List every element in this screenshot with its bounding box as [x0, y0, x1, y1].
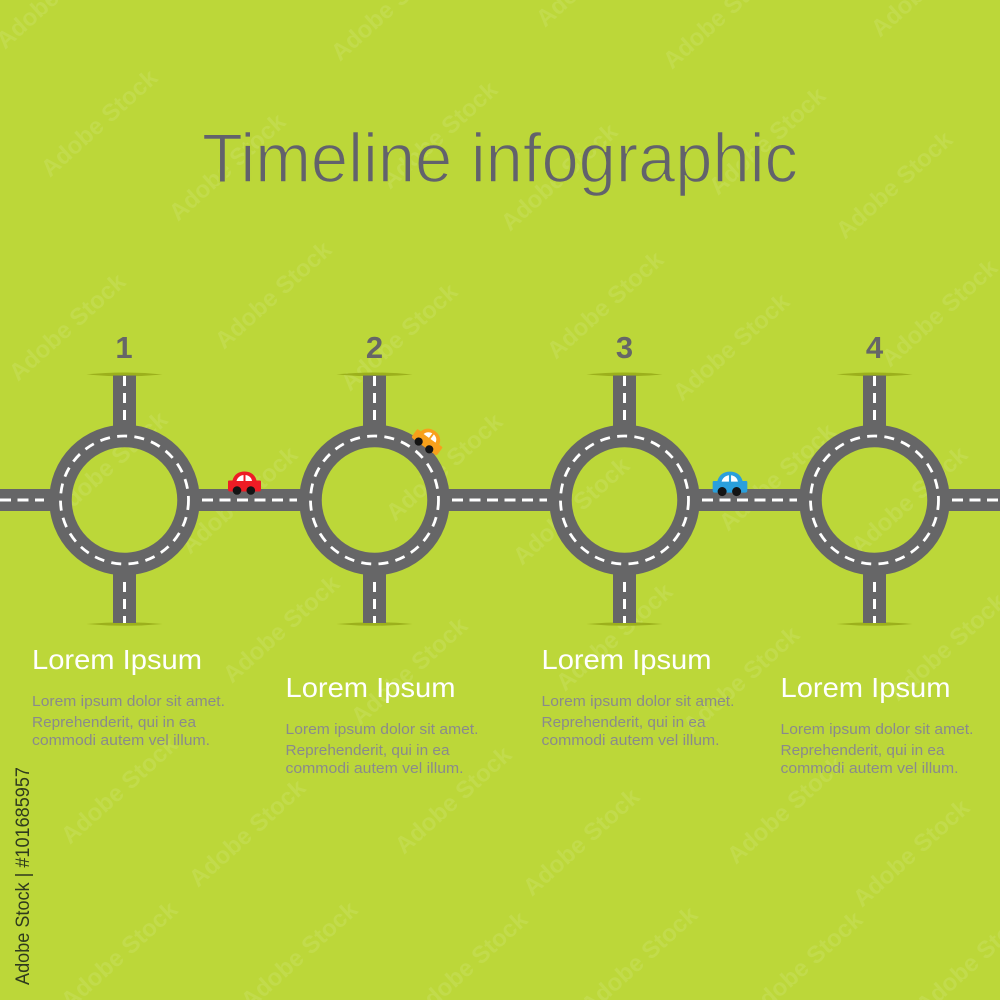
watermarks: Adobe Stock — [508, 452, 636, 570]
text block 1: Lorem ipsum dolor sit amet. — [32, 694, 225, 710]
text block 3 — [542, 644, 734, 749]
text block 1: Reprehenderit, qui in ea — [32, 715, 197, 731]
watermarks: Adobe Stock — [4, 268, 132, 386]
step numbers: 2 — [366, 330, 383, 365]
watermarks: Adobe Stock — [336, 278, 464, 396]
icon: orange car — [409, 422, 448, 458]
text block 1 — [32, 644, 225, 749]
watermarks: Adobe Stock — [551, 578, 679, 696]
text block 4: Lorem ipsum dolor sit amet. — [780, 722, 974, 738]
watermarks: Adobe Stock — [496, 118, 624, 236]
icon: red car — [228, 472, 261, 495]
watermarks: Adobe Stock — [542, 246, 670, 364]
title: Timeline infographic — [202, 119, 798, 197]
roundabout 4 — [810, 372, 938, 626]
text block 1: Lorem Ipsum — [32, 644, 202, 675]
watermarks: Adobe Stock — [36, 64, 164, 182]
stock id label: Adobe Stock | #101685957 — [13, 767, 34, 985]
watermarks: Adobe Stock — [722, 751, 850, 869]
text block 2: Lorem Ipsum — [286, 672, 456, 703]
text block 2: Lorem ipsum dolor sit amet. — [286, 722, 478, 738]
watermarks: Adobe Stock — [381, 408, 509, 526]
step numbers: 4 — [866, 330, 884, 365]
watermarks: Adobe Stock — [714, 418, 842, 536]
text block 4: Lorem Ipsum — [780, 672, 950, 703]
watermarks: Adobe Stock — [46, 406, 174, 524]
watermarks: Adobe Stock — [218, 570, 346, 688]
watermarks: Adobe Stock — [668, 288, 796, 406]
horizontal road segments — [0, 489, 1000, 511]
text block 3: Lorem Ipsum — [542, 644, 712, 675]
roundabout 3 — [560, 372, 688, 626]
watermarks: Adobe Stock — [390, 741, 518, 859]
watermarks: Adobe Stock — [831, 126, 959, 244]
watermarks: Adobe Stock — [876, 254, 1000, 372]
text block 3: Lorem ipsum dolor sit amet. — [542, 694, 734, 710]
watermarks: Adobe Stock — [376, 76, 504, 194]
watermarks: Adobe Stock — [704, 82, 832, 200]
watermarks: Adobe Stock — [184, 774, 312, 892]
text block 2: commodi autem vel illum. — [286, 761, 464, 777]
text block 3: commodi autem vel illum. — [542, 733, 720, 749]
text block 4: Reprehenderit, qui in ea — [780, 743, 945, 759]
step numbers: 1 — [115, 330, 133, 365]
roundabout 1 — [60, 372, 188, 626]
text block 3: Reprehenderit, qui in ea — [542, 715, 706, 731]
icon: blue car — [713, 472, 747, 496]
watermarks: Adobe Stock — [848, 794, 976, 912]
watermarks: Adobe Stock — [56, 731, 184, 849]
watermarks: Adobe Stock — [518, 783, 646, 901]
text block 4 — [780, 672, 974, 777]
text block 2 — [286, 672, 478, 777]
text block 1: commodi autem vel illum. — [32, 733, 210, 749]
watermarks: Adobe Stock — [846, 441, 974, 559]
watermarks: Adobe Stock — [176, 441, 304, 559]
step numbers: 3 — [616, 330, 633, 365]
watermarks: Adobe Stock — [210, 236, 338, 354]
roundabout 2 — [310, 372, 438, 626]
watermarks: Adobe Stock — [346, 612, 474, 730]
watermarks: Adobe Stock — [678, 621, 806, 739]
step numbers — [115, 330, 884, 365]
watermarks: Adobe Stock — [164, 108, 292, 226]
text block 2: Reprehenderit, qui in ea — [286, 743, 450, 759]
text block 4: commodi autem vel illum. — [780, 761, 958, 777]
